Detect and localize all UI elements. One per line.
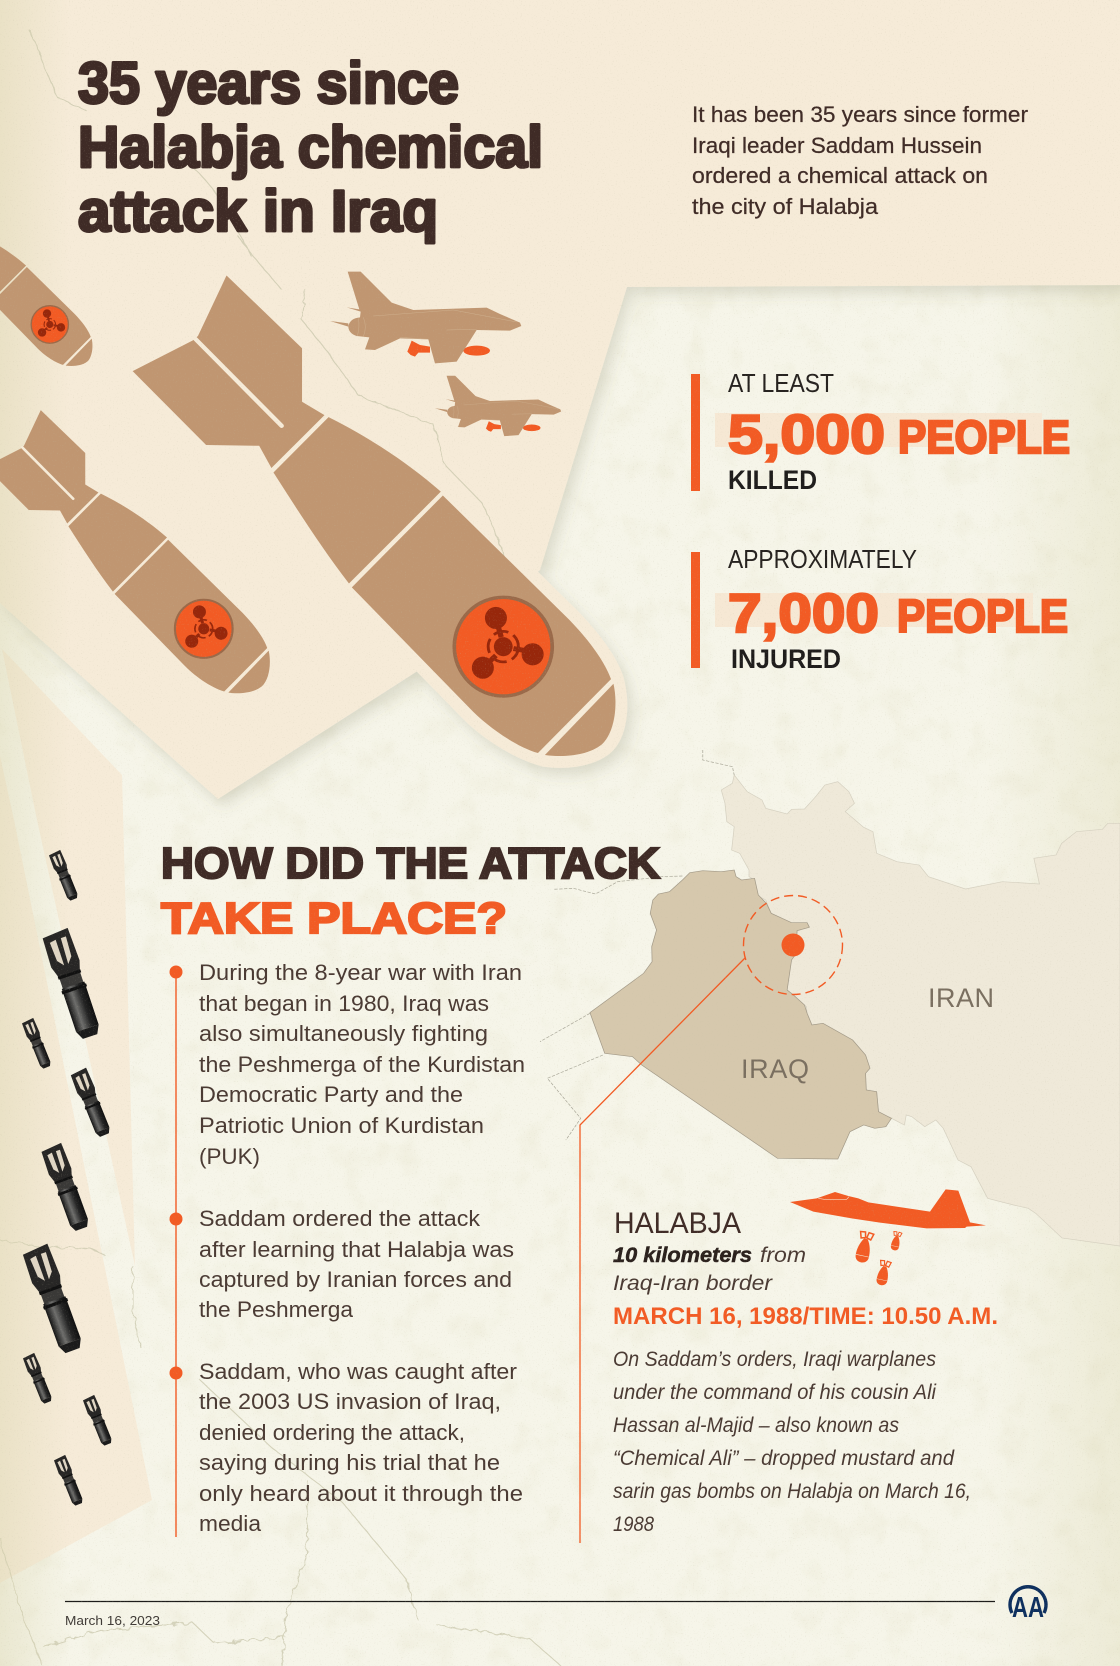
stat: injured: INJURED [731, 644, 841, 674]
text block: war with Iran: During the 8-year war with Iran [199, 960, 522, 985]
text block: Saddam ordered [199, 1206, 514, 1322]
section heading: HOW DID THE ATTACK [161, 839, 660, 888]
text block: war with Iran: the Peshmerga of the Kurdistan [199, 1052, 525, 1077]
text block: war with Iran: Democratic Party and the [199, 1082, 463, 1107]
icon: warplane two [435, 376, 561, 436]
icon: top left chemical bomb [0, 183, 92, 366]
text block: Chemical Ali [613, 1347, 971, 1536]
Halabja location details: from [760, 1243, 806, 1267]
text block: Saddam ordered: captured by Iranian forces and [199, 1267, 512, 1292]
neighbouring borders [540, 750, 734, 1140]
text block: Saddam denied [199, 1359, 523, 1536]
stat: injured [691, 544, 1068, 674]
intro text: Iraqi leader Saddam Hussein [692, 133, 982, 158]
text block: war with Iran [199, 960, 525, 1169]
logo: Anadolu Agency [1010, 1587, 1046, 1624]
left edge paper tint [0, 0, 70, 1666]
timeline [170, 966, 182, 1537]
text block: Saddam denied: only heard about it through the [199, 1481, 523, 1506]
map label: Iran: IRAN [928, 983, 994, 1013]
icon: black bombs column [21, 850, 114, 1507]
Halabja location details: Iraq-Iran border [613, 1271, 773, 1295]
intro text: ordered a chemical attack on [692, 163, 988, 188]
title: attack in Iraq [78, 179, 438, 244]
Halabja location details: 10 kilometers [613, 1243, 752, 1267]
text block: Chemical Ali: 1988 [613, 1512, 654, 1536]
text block: Saddam denied: the 2003 US invasion of Iraq, [199, 1389, 501, 1414]
stat: injured: 7,000 [728, 582, 879, 644]
text block: Chemical Ali: under the command of his cousin Ali [613, 1380, 937, 1404]
icon: large chemical bomb [133, 275, 615, 756]
map: Iran and Iraq [540, 750, 1120, 1246]
icon: orange jet dropping bombs [790, 1189, 986, 1286]
text block: war with Iran: also simultaneously fighting [199, 1021, 488, 1046]
icon: warplane one [330, 272, 521, 363]
text block: Saddam ordered: after learning that Halabja was [199, 1237, 514, 1262]
text block: Saddam denied: Saddam, who was caught after [199, 1359, 517, 1384]
stat: killed: AT LEAST [728, 368, 834, 398]
section heading: TAKE PLACE? [161, 894, 507, 943]
Halabja location details [613, 1207, 998, 1330]
cracks [0, 30, 561, 1666]
intro text: the city of Halabja [692, 194, 879, 219]
Halabja location details: HALABJA [614, 1207, 741, 1240]
text block: Chemical Ali: sarin gas bombs on Halabja on March 16, [613, 1479, 971, 1503]
title: Halabja chemical [78, 115, 543, 180]
stat: killed: PEOPLE [898, 411, 1070, 463]
stat: injured: PEOPLE [897, 590, 1068, 642]
intro text [692, 102, 1028, 219]
section heading [161, 839, 660, 943]
text block: Chemical Ali: On Saddam’s orders, Iraqi warplanes [613, 1347, 936, 1371]
text block: war with Iran: Patriotic Union of Kurdistan [199, 1113, 484, 1138]
stat: killed [691, 368, 1070, 495]
footer date: March 16, 2023 [65, 1613, 160, 1628]
Halabja location details: MARCH 16, 1988/TIME: 10.50 A.M. [613, 1303, 998, 1330]
title [78, 51, 543, 244]
stat: killed: KILLED [728, 465, 817, 495]
text block: war with Iran: that began in 1980, Iraq was [199, 991, 489, 1016]
text block: war with Iran: (PUK) [199, 1144, 260, 1169]
logo: Anadolu Agency: AA [1012, 1592, 1044, 1624]
title: 35 years since [78, 51, 459, 116]
map label: Iraq: IRAQ [741, 1054, 809, 1084]
Iraq [590, 870, 891, 1159]
text block: Saddam ordered: Saddam ordered the attack [199, 1206, 481, 1231]
text block: Chemical Ali: Hassan al-Majid – also known as [613, 1413, 899, 1437]
footer rule [65, 1600, 995, 1602]
Iran [721, 775, 1120, 1246]
text block: Saddam denied: denied ordering the attack, [199, 1420, 465, 1445]
stat: injured: APPROXIMATELY [728, 544, 917, 574]
text block: Saddam denied: saying during his trial that he [199, 1450, 500, 1475]
stat: killed: 5,000 [728, 403, 885, 465]
panel: beige side strips [0, 649, 152, 1583]
panel: beige header and bombs backdrop [0, 0, 1120, 799]
intro text: It has been 35 years since former [692, 102, 1028, 127]
map marker: Halabja [580, 896, 842, 1543]
text block: Chemical Ali: “Chemical Ali” – dropped mustard and [613, 1446, 955, 1470]
icon: middle chemical bomb [0, 410, 270, 693]
text block: Saddam denied: media [199, 1511, 262, 1536]
text block: Saddam ordered: the Peshmerga [199, 1297, 354, 1322]
